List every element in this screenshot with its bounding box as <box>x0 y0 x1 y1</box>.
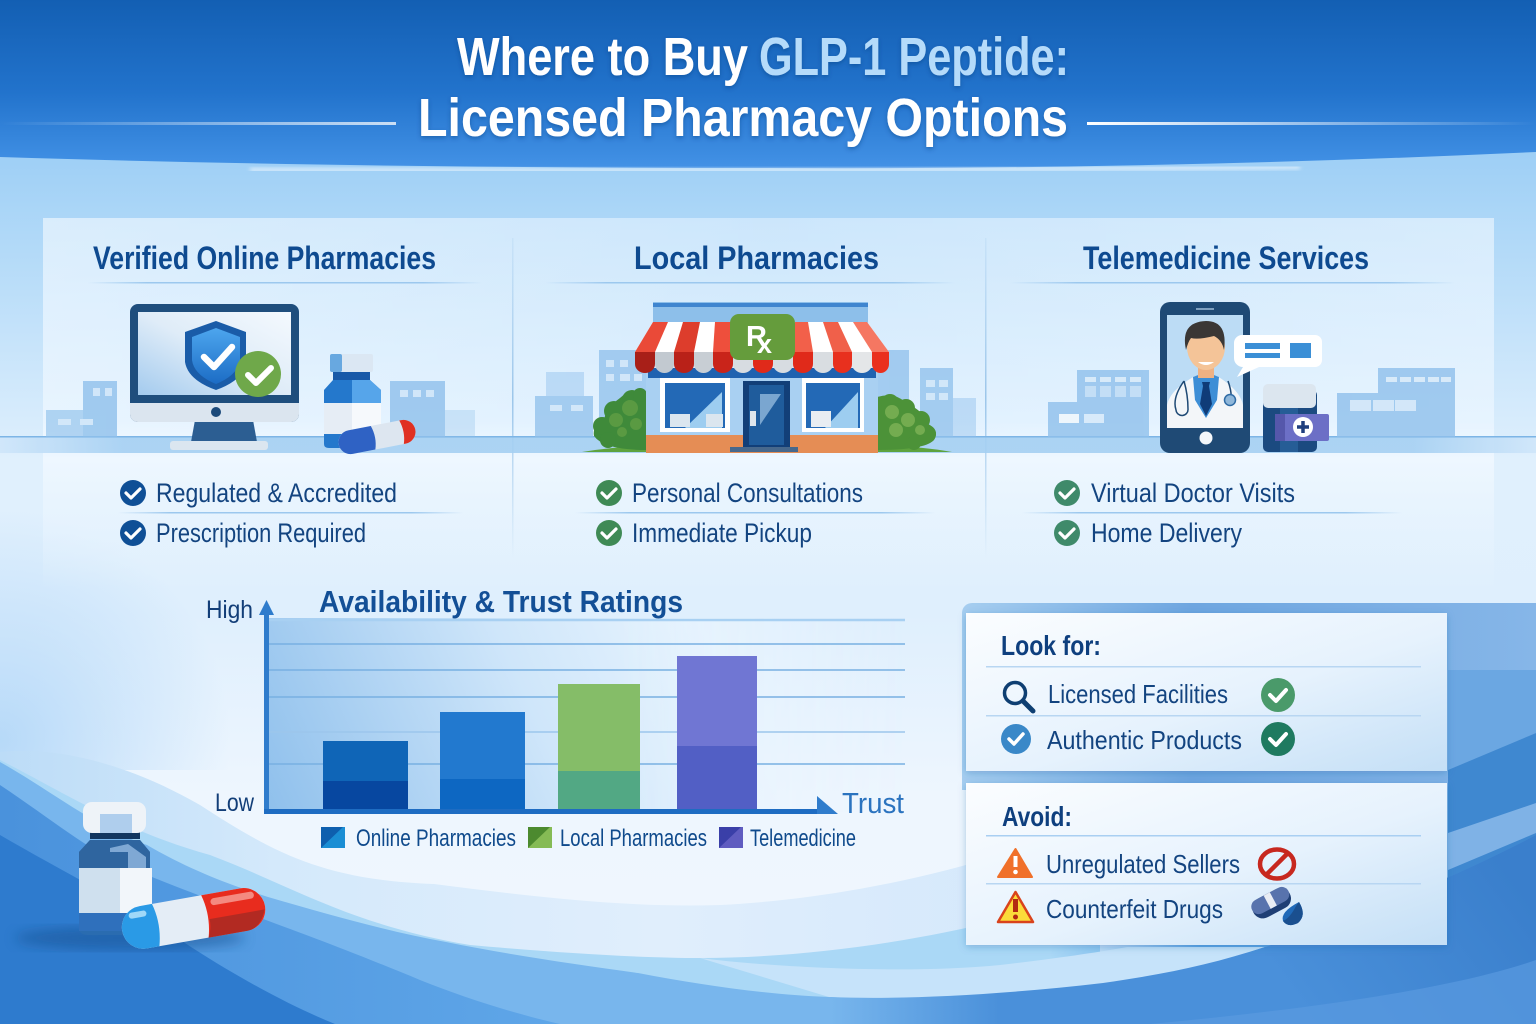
skyline: online <box>46 381 475 437</box>
panel: look for: Licensed Facilities <box>1048 679 1228 709</box>
legend <box>321 825 856 852</box>
check list: telemedicine <box>1022 478 1402 548</box>
panel: avoid: Counterfeit Drugs <box>1046 894 1223 924</box>
skyline: telemedicine <box>1048 368 1455 437</box>
check list: online: Prescription Required <box>156 518 366 548</box>
check list: telemedicine: Virtual Doctor Visits <box>1091 478 1295 508</box>
panel: avoid: Unregulated Sellers <box>1046 849 1240 879</box>
chart heading: Availability & Trust Ratings <box>319 584 683 619</box>
check list: local <box>575 478 935 548</box>
icon: bottle and pill <box>324 354 418 456</box>
icon: pills <box>1249 884 1303 925</box>
bar: telemedicine <box>677 656 757 809</box>
column: local pharmacies <box>535 240 976 548</box>
grid <box>268 620 905 764</box>
chart plot background <box>269 618 677 809</box>
bar: local <box>558 684 640 809</box>
icon: green check <box>1261 678 1295 712</box>
legend: Online Pharmacies <box>356 825 516 852</box>
title: Licensed Pharmacy Options <box>418 88 1068 148</box>
icon: computer with shield <box>130 304 299 450</box>
legend: Telemedicine <box>750 825 856 852</box>
heading: look for: Look for: <box>1001 630 1101 661</box>
heading: local: Local Pharmacies <box>634 240 879 276</box>
check list: online <box>118 478 463 548</box>
ground band <box>0 437 1536 453</box>
icon: pharmacy storefront: R <box>746 321 767 353</box>
bar: online 1 <box>323 741 408 809</box>
panel: look for <box>966 613 1447 771</box>
icon: blue check <box>1001 724 1031 754</box>
check list: local: Immediate Pickup <box>632 518 812 548</box>
icon: magnifier <box>1004 682 1033 711</box>
column: telemedicine services <box>1010 240 1455 548</box>
skyline: local <box>535 350 976 437</box>
check list: telemedicine: Home Delivery <box>1091 518 1242 548</box>
header band <box>0 0 1536 168</box>
check list: local: Personal Consultations <box>632 478 863 508</box>
chart: availability and trust ratings <box>206 584 908 852</box>
icon: prohibited <box>1260 850 1294 878</box>
axis y: High <box>206 596 253 624</box>
title decorative lines <box>0 122 1536 125</box>
title: GLP-1 Peptide: <box>759 27 1069 87</box>
axis y: Low <box>215 789 255 817</box>
icon: vial and capsule bottom-left <box>15 802 269 952</box>
check list: online: Regulated & Accredited <box>156 478 397 508</box>
icon: phone with doctor <box>1160 302 1250 453</box>
icon: orange warning <box>998 849 1032 877</box>
heading: telemedicine: Telemedicine Services <box>1083 240 1369 276</box>
title <box>418 27 1069 148</box>
icon: medicine jar and kit <box>1263 384 1329 452</box>
title: Where to Buy <box>457 27 748 87</box>
panel: pharmacy options <box>0 218 1536 952</box>
heading: avoid: Avoid: <box>1002 801 1072 832</box>
icon: dark green check <box>1261 722 1295 756</box>
heading: online: Verified Online Pharmacies <box>93 240 436 276</box>
panel: look for: Authentic Products <box>1047 725 1242 755</box>
axis x <box>264 788 904 820</box>
icon: chat bubble <box>1234 335 1322 377</box>
icon: yellow warning <box>998 892 1033 922</box>
icon: pharmacy storefront: x <box>757 329 772 359</box>
header glow line <box>250 167 1300 171</box>
bottom wave background <box>0 603 1536 1024</box>
panel: avoid <box>966 783 1447 945</box>
legend: Local Pharmacies <box>560 825 707 852</box>
axis y <box>206 596 274 817</box>
column: verified online pharmacies <box>46 240 482 548</box>
bar: online 2 <box>440 712 525 809</box>
axis x: Trust <box>842 788 904 820</box>
icon: pharmacy storefront <box>582 302 952 453</box>
